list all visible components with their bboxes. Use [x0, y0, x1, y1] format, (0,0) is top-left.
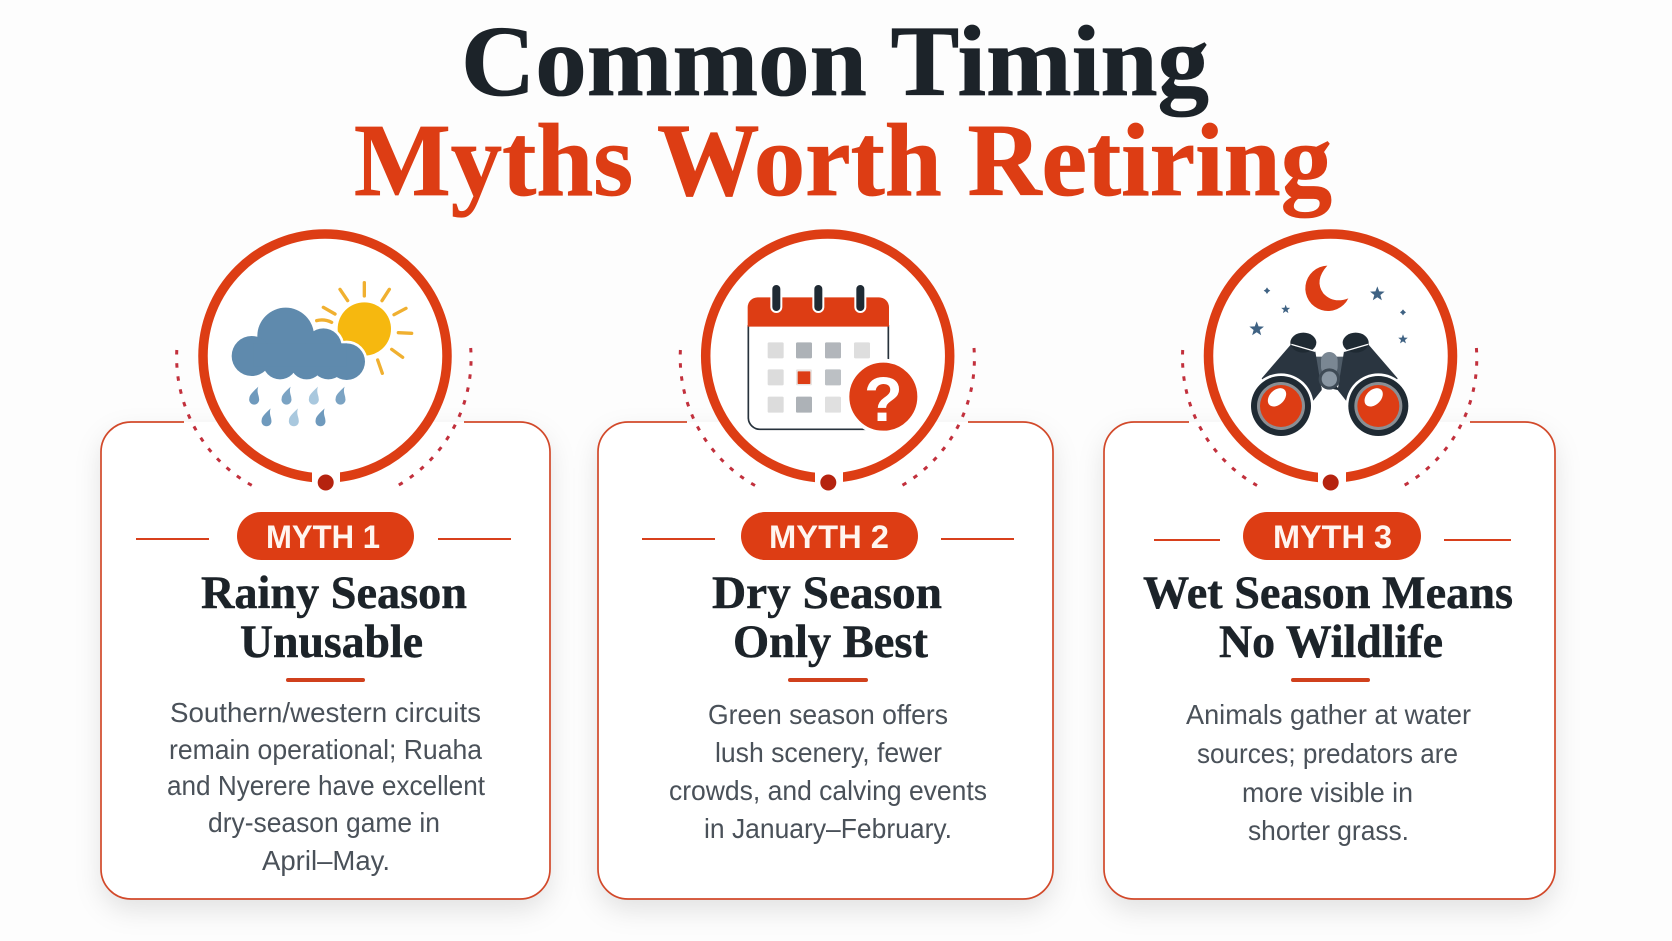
icon: calendar with question mark — [748, 284, 919, 435]
text: myth 3 body: more visible in — [1242, 777, 1413, 808]
heading: myth 1 — [201, 567, 467, 668]
text: myth 1 body: and Nyerere have excellent — [167, 770, 485, 801]
text: myth 2 body — [669, 699, 987, 844]
heading: myth 2: Dry Season — [712, 567, 942, 619]
heading: myth 2 — [712, 567, 942, 668]
text: myth 2 body: lush scenery, fewer — [715, 737, 942, 768]
badge: myth 3: MYTH 3 — [1273, 519, 1392, 555]
title — [354, 5, 1332, 218]
text: myth 2 body: Green season offers — [708, 699, 948, 730]
panel: myth 3 — [1104, 234, 1555, 899]
badge: myth 1: MYTH 1 — [266, 519, 380, 555]
icon ring: myth 1 — [203, 234, 447, 478]
text: myth 1 body: dry-season game in — [208, 807, 440, 838]
panel: myth 2 — [598, 234, 1053, 899]
icon: calendar with question mark: ? — [864, 365, 903, 435]
text: myth 3 body: Animals gather at water — [1186, 699, 1471, 730]
heading: myth 3: Wet Season Means — [1143, 567, 1513, 619]
text: myth 2 body: in January–February. — [704, 813, 952, 844]
text: myth 3 body — [1186, 699, 1471, 846]
badge: myth 3 — [1154, 512, 1511, 560]
title: Common Timing — [461, 5, 1209, 117]
text: myth 1 body: April–May. — [262, 845, 390, 876]
text: myth 3 body: shorter grass. — [1248, 815, 1409, 846]
badge: myth 2 — [642, 512, 1014, 560]
icon: binoculars under moon and stars — [1243, 266, 1411, 443]
badge: myth 1 — [136, 512, 511, 560]
heading: myth 1: Unusable — [240, 616, 423, 668]
icon ring: myth 2 — [706, 234, 950, 478]
icon ring: myth 3 — [1208, 234, 1452, 478]
text: myth 2 body: crowds, and calving events — [669, 775, 987, 806]
heading: myth 3 — [1143, 567, 1513, 668]
text: myth 3 body: sources; predators are — [1197, 738, 1458, 769]
heading: myth 3: No Wildlife — [1219, 616, 1443, 668]
heading: myth 2: Only Best — [733, 616, 928, 668]
title: Myths Worth Retiring — [354, 103, 1332, 218]
heading: myth 1: Rainy Season — [201, 567, 467, 619]
text: myth 1 body: remain operational; Ruaha — [169, 734, 482, 765]
text: myth 1 body: Southern/western circuits — [170, 697, 481, 728]
text: myth 1 body — [167, 697, 485, 876]
badge: myth 2: MYTH 2 — [769, 519, 889, 555]
icon: rain cloud and sun — [232, 283, 412, 426]
panel: myth 1 — [101, 234, 550, 899]
